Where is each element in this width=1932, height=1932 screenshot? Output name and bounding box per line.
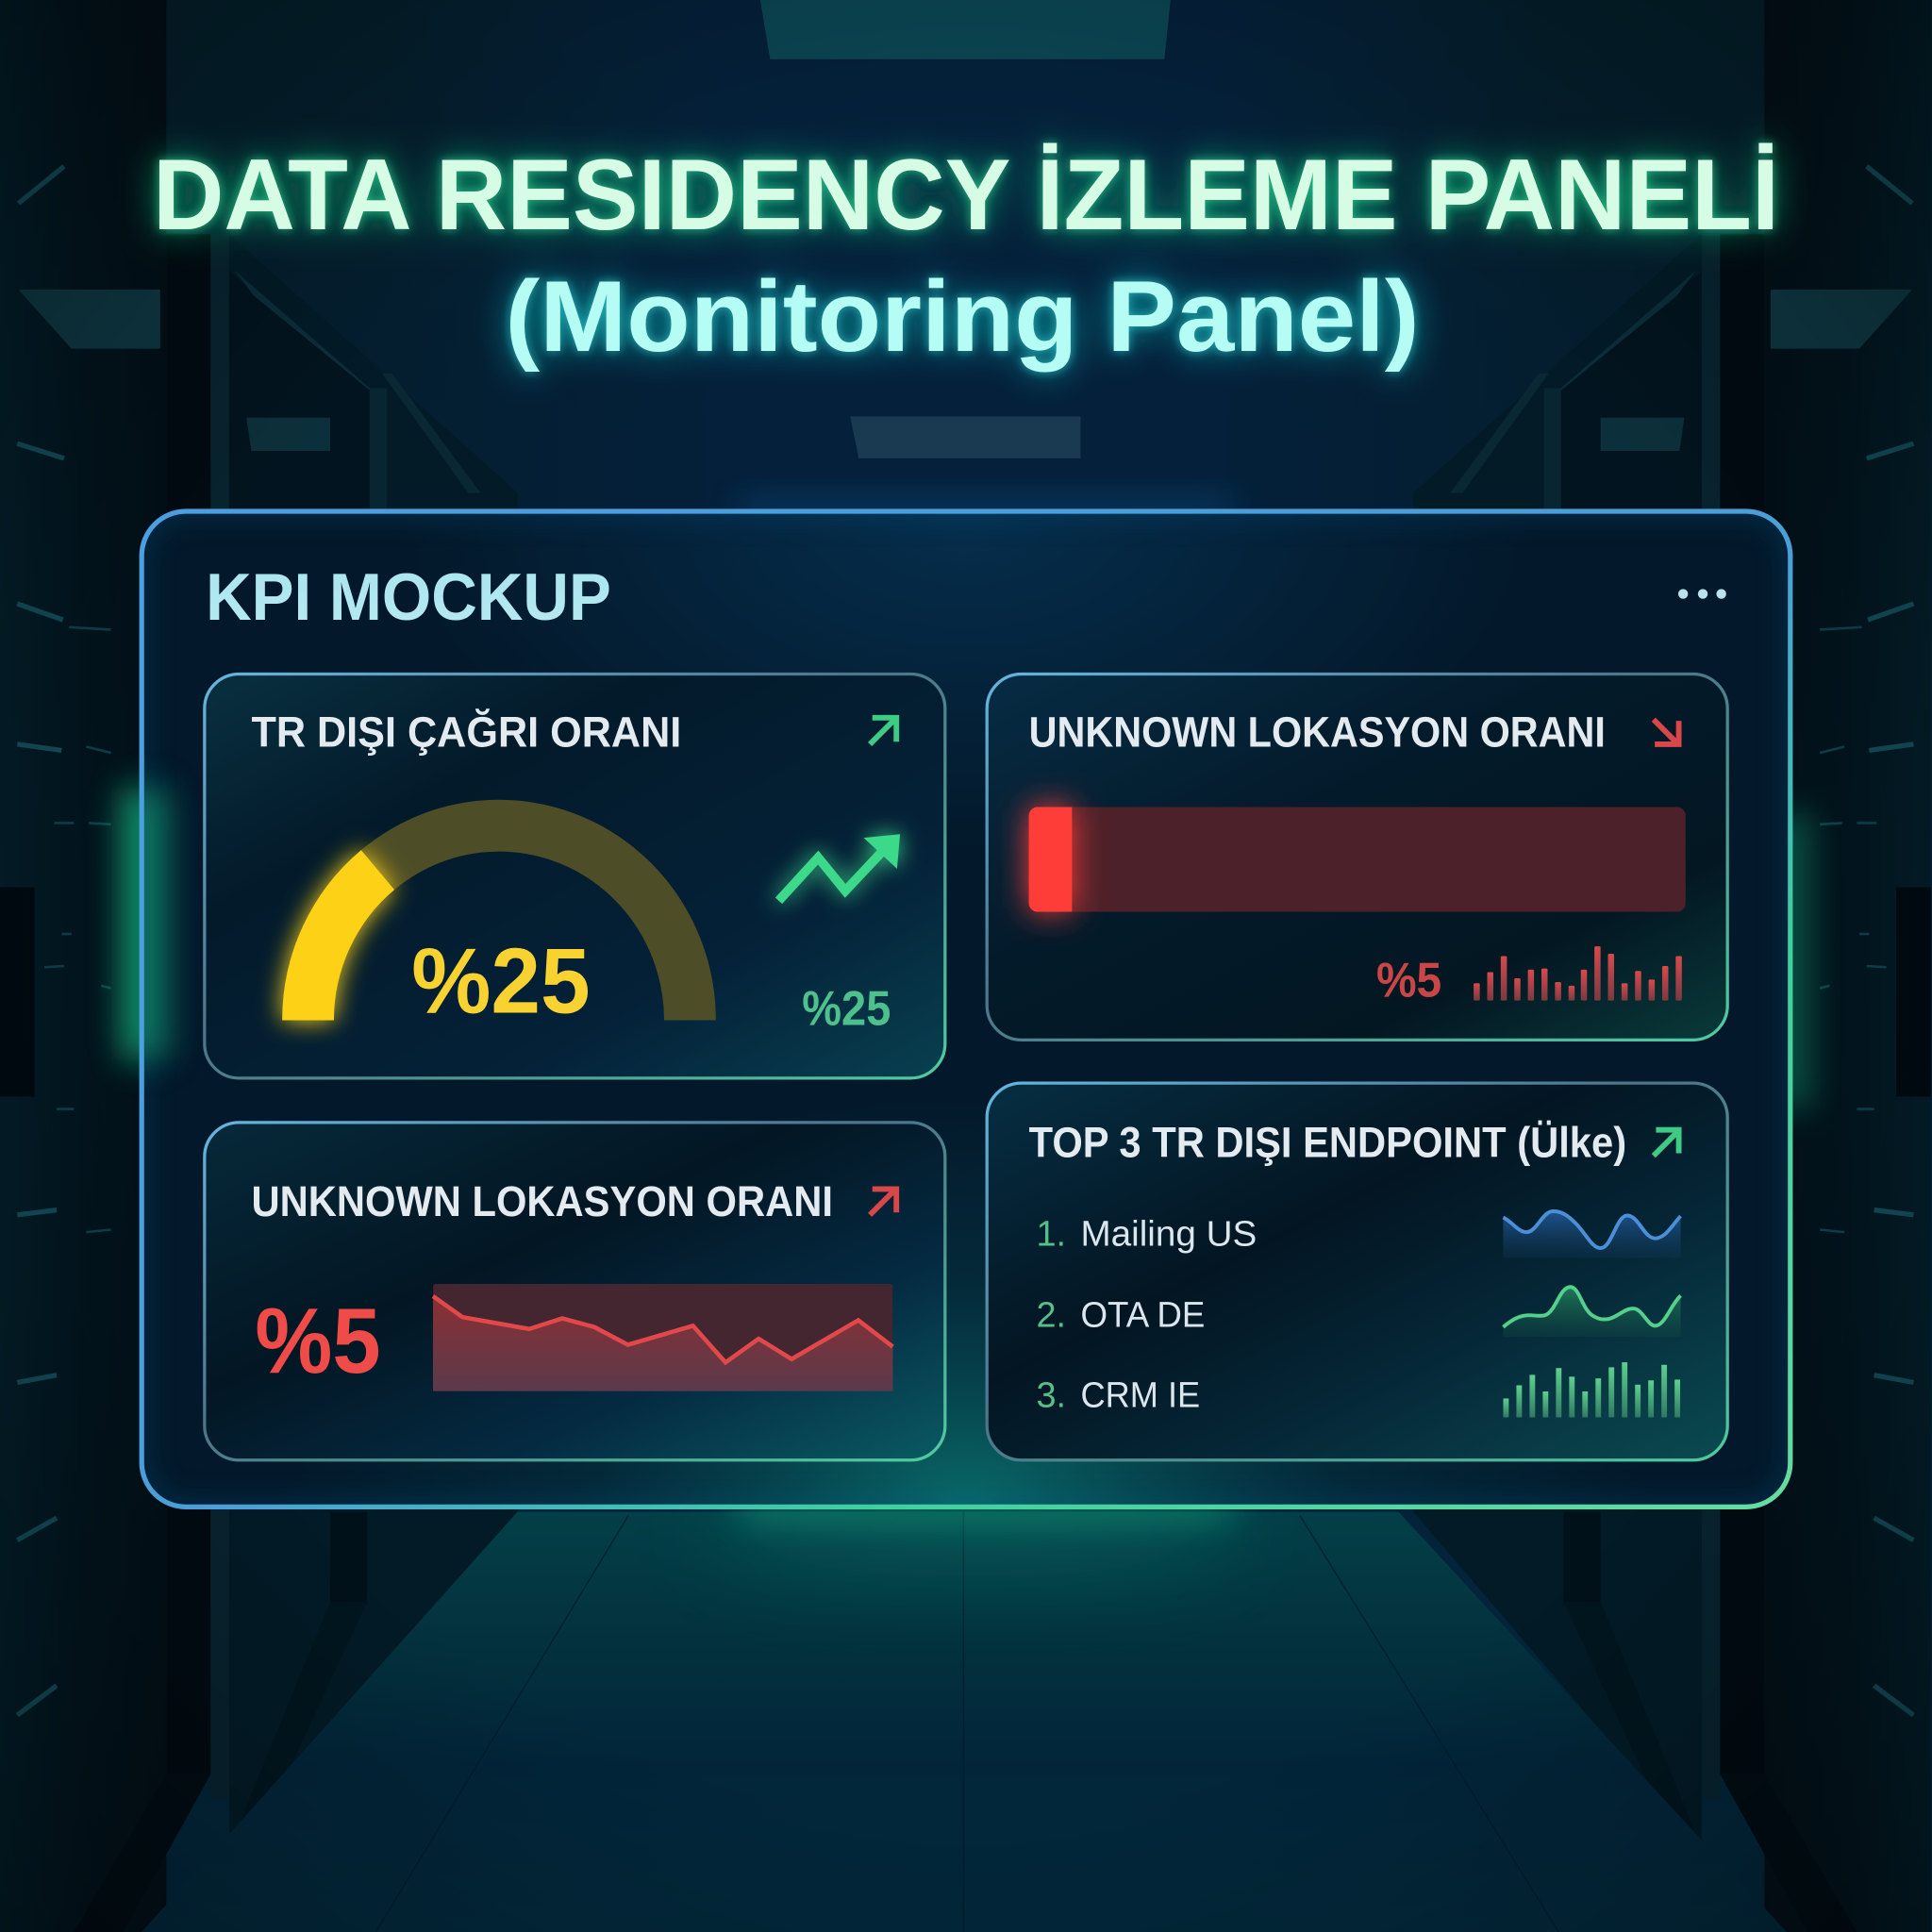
trend value: %25 xyxy=(802,982,891,1037)
card: Unknown lokasyon oranı bar xyxy=(987,674,1727,1040)
icon: red down arrow xyxy=(1654,720,1679,744)
list item 1: Mailing US xyxy=(1080,1214,1257,1254)
card heading: TR DIŞI ÇAĞRI ORANI xyxy=(251,708,681,757)
list item 1: 1. xyxy=(1036,1214,1066,1254)
gauge value: %25 xyxy=(411,929,591,1033)
card: TR dışı çağrı oranı xyxy=(205,674,945,1078)
icon: red up arrow xyxy=(870,1189,896,1215)
menu dots xyxy=(1678,589,1726,599)
list item 3: 3. xyxy=(1036,1376,1066,1416)
value: %5 xyxy=(1376,954,1441,1008)
card: Unknown lokasyon oranı trend xyxy=(205,1123,945,1460)
list item 2: 2. xyxy=(1036,1296,1066,1336)
icon: green trend arrow xyxy=(778,834,900,901)
main panel glow: green left and bottom halos xyxy=(124,499,1808,1521)
gauge chart xyxy=(308,825,690,1020)
sparkbars: green xyxy=(1503,1362,1680,1417)
title line 2: (Monitoring Panel) xyxy=(506,259,1420,373)
icon: green up arrow xyxy=(1654,1130,1679,1156)
panel: KPI mockup xyxy=(124,499,1803,1519)
card heading: TOP 3 TR DIŞI ENDPOINT (Ülke) xyxy=(1029,1118,1626,1166)
list item 3: CRM IE xyxy=(1080,1376,1200,1416)
heading: KPI MOCKUP: KPI MOCKUP xyxy=(206,559,611,634)
progress bar track xyxy=(1029,808,1686,912)
title line 1: DATA RESIDENCY İZLEME PANELİ xyxy=(153,138,1779,251)
value: %5 xyxy=(255,1289,381,1392)
mini bar chart xyxy=(1474,946,1682,1001)
list item 2: OTA DE xyxy=(1080,1296,1205,1336)
progress bar fill xyxy=(1029,808,1072,912)
icon: green up arrow xyxy=(870,718,896,744)
card heading: UNKNOWN LOKASYON ORANI xyxy=(251,1177,833,1225)
area line chart xyxy=(433,1284,892,1391)
card heading: UNKNOWN LOKASYON ORANI xyxy=(1029,708,1606,757)
sparkline: green xyxy=(1503,1287,1681,1337)
sparkline: blue xyxy=(1503,1211,1681,1258)
card: Top 3 TR dışı endpoint xyxy=(987,1083,1727,1460)
